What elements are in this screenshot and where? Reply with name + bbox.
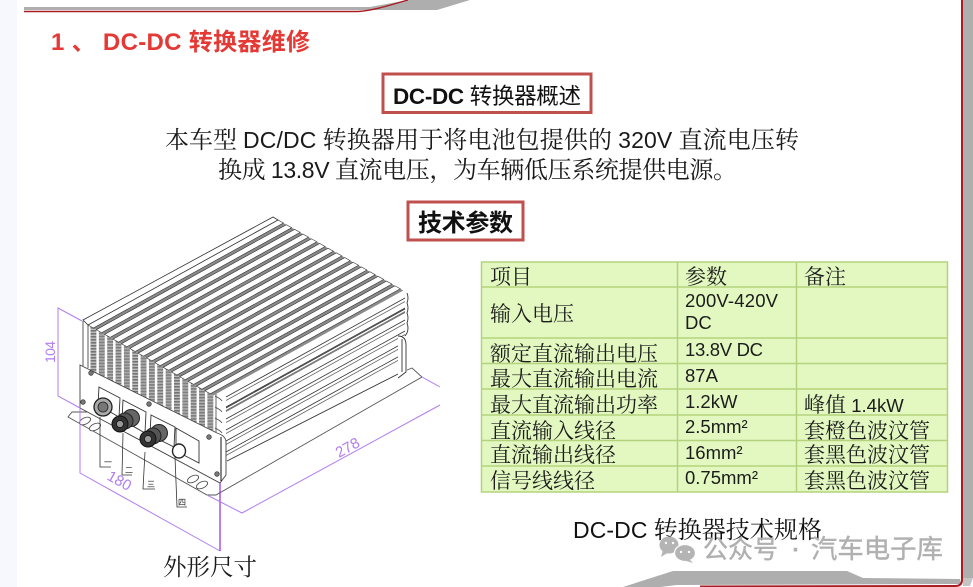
column two: 0.75mm² (685, 467, 758, 488)
dimension 180 (80, 408, 220, 551)
connector leader labels: 一 (104, 458, 112, 467)
overview paragraph (165, 127, 799, 184)
section title: 1 、 DC-DC 转换器维修 (51, 29, 310, 56)
connector four (172, 428, 199, 463)
column two: 200V-420V (685, 290, 779, 311)
dimension 180: 180 (104, 468, 134, 495)
column one: 最大直流输出功率 (490, 393, 658, 417)
column one: 直流输出线径 (490, 443, 616, 467)
front plate (80, 365, 226, 483)
column two: 1.2kW (685, 391, 738, 412)
column two: 87A (685, 365, 719, 386)
heading box: overview (383, 74, 591, 112)
column one: 输入电压 (490, 302, 574, 326)
top heat-sink fins (83, 217, 403, 444)
column one: 信号线线径 (490, 469, 595, 493)
column one: 直流输入线径 (490, 419, 616, 443)
column three: 备注 (804, 265, 846, 289)
connector one (94, 387, 120, 417)
column two: DC (685, 312, 712, 333)
overview paragraph: DC/DC 转换器用于将电池包提供的 320V 直流电压转 (243, 127, 799, 154)
column three: 套黑色波汶管 (804, 469, 930, 493)
column two: 16mm² (685, 442, 743, 463)
connector two (112, 400, 146, 433)
column three: 套橙色波汶管 (804, 419, 930, 443)
column two: 13.8V DC (685, 339, 763, 360)
overview paragraph: 本车型 (165, 127, 237, 154)
connector leader labels: 二 (125, 466, 133, 475)
heading box: technical parameters (408, 202, 523, 240)
column two: 参数 (685, 265, 727, 289)
drawing caption: 外形尺寸 (163, 554, 257, 581)
column one (490, 265, 658, 493)
column one: 最大直流输出电流 (490, 367, 658, 391)
heading box: technical parameters: 技术参数 (418, 209, 513, 237)
icon: chat bubbles (660, 536, 696, 563)
dimension 278: 278 (333, 434, 363, 461)
column one: 额定直流输出电压 (490, 342, 658, 366)
dimension 104 (42, 308, 82, 408)
mounting screws (81, 371, 219, 476)
column two (685, 265, 779, 488)
dimension 104: 104 (42, 341, 58, 363)
watermark (660, 534, 943, 564)
table caption: DC-DC 转换器技术规格 (573, 517, 822, 544)
body side face with fins (213, 293, 408, 462)
right and bottom decorative frame (623, 0, 973, 587)
overview paragraph: 换成 13.8V 直流电压，为车辆低压系统提供电源。 (218, 157, 737, 184)
device drawing: DC-DC converter with dimensions (42, 217, 440, 551)
connector leader labels (100, 417, 187, 507)
page background strip (0, 0, 17, 587)
connector three (140, 415, 175, 447)
column two: 2.5mm² (685, 416, 748, 437)
top decorative band (24, 0, 470, 12)
column three (804, 265, 930, 493)
column one: 项目 (490, 265, 532, 289)
watermark: · (792, 536, 800, 564)
column three: 套黑色波汶管 (804, 443, 930, 467)
heading box: overview: DC-DC 转换器概述 (393, 84, 581, 109)
watermark: 汽车电子库 (811, 534, 943, 564)
dimension 278 (207, 377, 440, 513)
connector leader labels: 四 (178, 498, 186, 507)
base plate (68, 368, 422, 495)
connector leader labels: 三 (147, 480, 155, 489)
column three: 峰值 1.4kW (804, 393, 904, 417)
watermark: 公众号 (703, 536, 778, 564)
specification table (481, 262, 948, 493)
base slots (78, 416, 209, 490)
